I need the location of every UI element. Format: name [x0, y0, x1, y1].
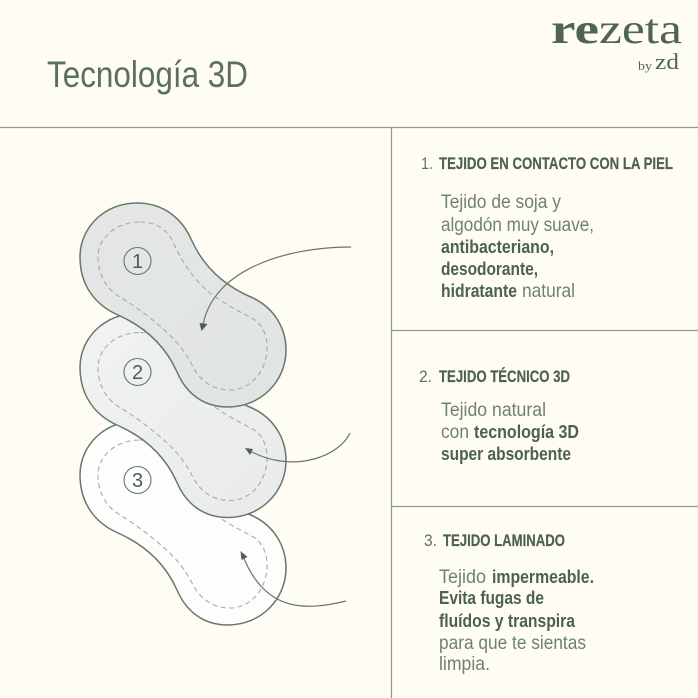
description 2: con — [441, 422, 469, 443]
number badge 3: 3 — [132, 470, 143, 492]
panel: tejido en contacto con la piel — [421, 155, 673, 302]
heading 1: 1. — [421, 155, 433, 173]
logo: rezeta by zd: by — [638, 58, 653, 73]
heading 2: TEJIDO TÉCNICO 3D — [439, 367, 570, 386]
layer 2: technical 3D fabric — [80, 314, 286, 518]
heading 2 — [419, 367, 570, 386]
arrow to layer 1 — [200, 247, 351, 331]
description 3: fluídos y transpira — [439, 610, 576, 631]
heading 2: 2. — [419, 368, 432, 386]
description 2 — [441, 400, 579, 464]
title: Tecnología 3D — [47, 54, 248, 95]
description 1: hidratante — [441, 280, 517, 301]
heading 3: TEJIDO LAMINADO — [443, 532, 565, 550]
description 3 — [439, 566, 594, 675]
description 3: Evita fugas de — [439, 587, 544, 608]
description 2: super absorbente — [441, 443, 571, 464]
description 1: Tejido de soja y — [441, 192, 561, 213]
number badge 1: 1 — [132, 251, 143, 273]
number badge 1 — [124, 248, 151, 274]
panel: tejido laminado — [424, 532, 594, 675]
description 3: Tejido — [439, 567, 486, 588]
description 1: natural — [522, 281, 575, 302]
logo: rezeta by zd — [551, 7, 682, 74]
description 1 — [441, 192, 594, 302]
description 3: limpia. — [439, 654, 490, 675]
description 2: tecnología 3D — [474, 421, 579, 442]
pad illustration: three stacked layers — [80, 203, 351, 625]
layer 1: skin-contact fabric — [80, 203, 286, 407]
description 1: algodón muy suave, — [441, 215, 594, 236]
description 3: impermeable. — [492, 566, 594, 587]
arrow to layer 2 — [245, 433, 350, 462]
logo: rezeta by zd: zd — [655, 49, 679, 74]
number badge 2 — [124, 358, 151, 386]
description 2: Tejido natural — [441, 400, 546, 421]
description 1: desodorante, — [441, 258, 538, 279]
description 1: antibacteriano, — [441, 236, 554, 257]
heading 3: 3. — [424, 532, 437, 550]
logo: rezeta by zd: zeta — [599, 7, 682, 53]
arrow to layer 3 — [240, 551, 346, 606]
description 3: para que te sientas — [439, 633, 586, 654]
number badge 2: 2 — [132, 362, 143, 384]
layer 3: laminated fabric — [80, 421, 286, 625]
panel: tejido técnico 3D — [419, 367, 579, 464]
logo: rezeta by zd: re — [551, 7, 599, 53]
number badge 3 — [124, 466, 151, 494]
